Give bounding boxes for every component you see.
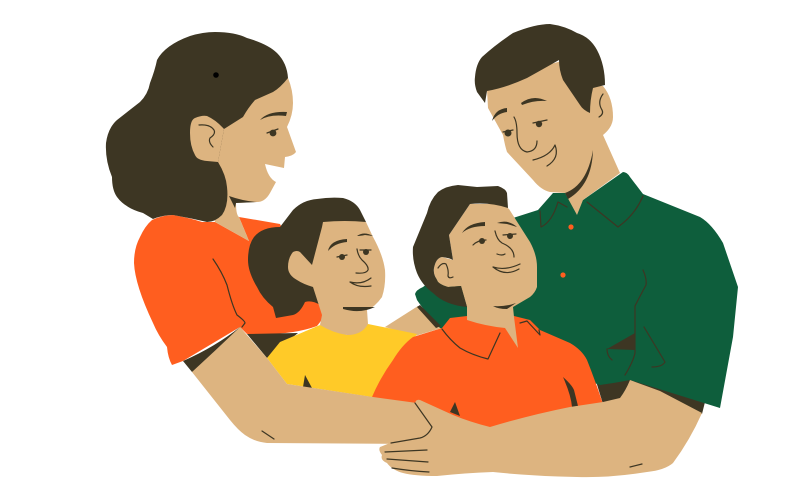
- girl face and neck: [288, 221, 385, 335]
- mother arm: [192, 327, 440, 444]
- boy eyebrows: [462, 222, 517, 233]
- father eyebrows: [492, 98, 547, 121]
- girl eyes: [337, 249, 371, 260]
- boy shirt: [372, 316, 603, 432]
- father body: [385, 172, 738, 414]
- girl eyebrows: [328, 234, 373, 251]
- father nose: [514, 117, 537, 152]
- mother hair: [106, 32, 288, 222]
- boy neck and face: [434, 204, 537, 348]
- father collar lines: [540, 196, 643, 227]
- boy collar lines: [442, 321, 540, 359]
- hair clip dot: [213, 72, 219, 78]
- girl: [248, 198, 417, 397]
- mother ear: [190, 116, 224, 162]
- father shirt: [415, 172, 738, 408]
- mother sleeve line: [213, 259, 245, 327]
- boy: [372, 185, 603, 432]
- father far arm: [385, 306, 445, 336]
- father ear line: [599, 94, 603, 117]
- finger lines: [385, 450, 429, 472]
- father elbow crease: [630, 464, 642, 467]
- mother chin shadow: [229, 196, 257, 208]
- mother shirt: [134, 215, 324, 365]
- father armpit shadow: [607, 333, 635, 350]
- mother elbow crease: [262, 431, 274, 439]
- mother ear line: [199, 125, 214, 147]
- boy ear line: [438, 264, 453, 278]
- father arm and hand: [379, 380, 702, 477]
- mother eye: [267, 129, 278, 136]
- boy chin shadow: [493, 303, 516, 309]
- girl shirt fold: [303, 375, 312, 388]
- father neck shadow: [565, 150, 593, 199]
- father smile: [533, 145, 556, 166]
- father hair: [475, 24, 605, 113]
- mother eyebrow: [260, 112, 287, 120]
- mother: [106, 32, 324, 372]
- boy shirt folds: [450, 377, 578, 416]
- mother neck and face: [205, 78, 296, 241]
- girl chin shadow: [343, 307, 375, 311]
- arms embracing: [192, 327, 702, 477]
- father eyes: [503, 120, 547, 136]
- boy smile: [493, 264, 520, 273]
- boy nose: [495, 231, 514, 257]
- girl hair bun: [248, 198, 366, 318]
- shirt button: [568, 224, 574, 230]
- boy eyes: [473, 233, 516, 245]
- girl shirt: [267, 324, 417, 397]
- shirt button: [560, 272, 566, 278]
- boy hair: [413, 185, 508, 307]
- father face and neck: [487, 60, 620, 215]
- mother mouth: [265, 164, 284, 182]
- far arm shadow: [417, 305, 441, 328]
- father head: [475, 24, 620, 215]
- girl smile: [350, 278, 371, 286]
- hand outline: [391, 403, 432, 443]
- shadow under father shirt: [595, 370, 706, 414]
- girl nose: [356, 249, 368, 273]
- shirt wrinkles: [607, 270, 665, 375]
- mother under-arm shadow: [183, 327, 298, 372]
